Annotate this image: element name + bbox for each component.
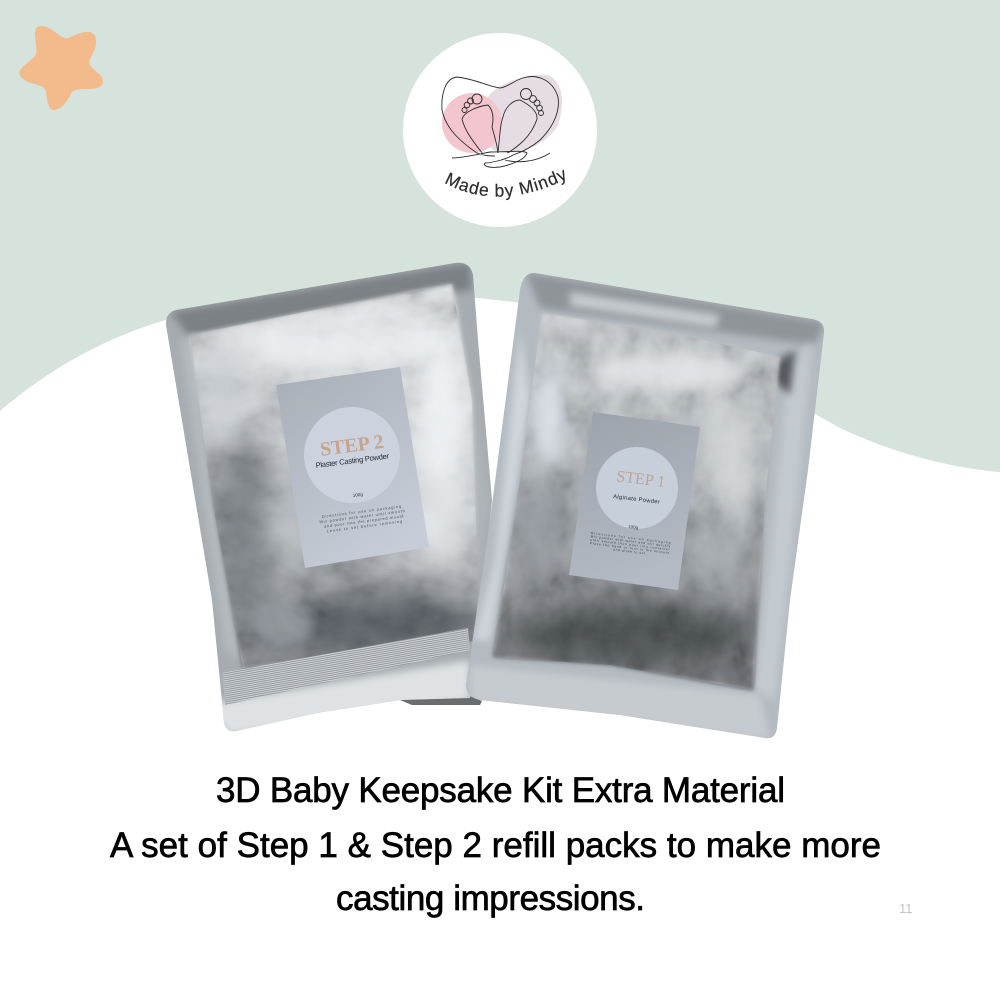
label: Step 2 xyxy=(276,367,429,568)
label directions: and allow to set xyxy=(613,547,645,555)
label directions: until smooth then pour into container xyxy=(590,538,670,551)
caption line 3: casting impressions. xyxy=(336,879,645,918)
label directions: Directions for use on packaging xyxy=(591,531,671,545)
caption line 2: A set of Step 1 & Step 2 refill packs to make more xyxy=(110,826,881,865)
foil frame shading xyxy=(470,272,825,740)
foil crinkle texture xyxy=(190,284,478,668)
label weight: 100g xyxy=(628,524,639,530)
label directions: Directions for use on packaging xyxy=(321,504,401,519)
logo badge xyxy=(403,33,597,227)
page number: 11 xyxy=(899,901,912,916)
label directions xyxy=(319,503,406,534)
label directions: and pour into the prepared mould xyxy=(324,513,404,529)
label directions: Place the hand or foot in the mixture xyxy=(590,541,670,555)
logo: lilac blob xyxy=(487,75,562,153)
label title: STEP 2 xyxy=(319,431,385,461)
caption line 1: 3D Baby Keepsake Kit Extra Material xyxy=(216,771,785,810)
logo: left foot xyxy=(462,94,498,154)
foil crinkle texture xyxy=(485,305,785,695)
label directions xyxy=(589,531,671,558)
label circle xyxy=(304,407,400,503)
foil highlights and shadows xyxy=(190,284,477,668)
label circle xyxy=(596,447,678,529)
foil highlights and shadows xyxy=(485,305,785,695)
icon: peach star xyxy=(19,26,103,110)
logo: Made by Mindy wordmark: Made by Mindy xyxy=(445,170,565,200)
label subtitle: Plaster Casting Powder xyxy=(315,451,390,470)
background: white curved hill xyxy=(0,294,1000,1000)
label: Step 1 xyxy=(569,412,700,590)
foil body xyxy=(493,313,780,690)
label directions: Mix powder with water until smooth xyxy=(319,508,405,524)
logo: right foot xyxy=(498,88,544,153)
pack outline and seal frame xyxy=(466,273,824,738)
label directions: Mix powder with water and stir quickly xyxy=(590,534,671,548)
pack outline and seal frame xyxy=(166,263,492,731)
label directions: Leave to set before removing xyxy=(326,519,402,533)
shadow strip under packs xyxy=(400,696,482,705)
caption text xyxy=(110,771,881,918)
logo: heart and string line xyxy=(442,77,558,167)
bottom seal stripe xyxy=(222,628,470,705)
label title: STEP 1 xyxy=(616,468,666,491)
label subtitle: Alginate Powder xyxy=(613,494,660,506)
label weight: 100g xyxy=(352,492,364,498)
logo: pink blob xyxy=(442,93,502,153)
foil body xyxy=(190,284,480,668)
product: Step 2 foil pack xyxy=(166,262,492,735)
product: Step 1 foil pack xyxy=(466,272,825,740)
foil frame shading xyxy=(170,262,490,735)
